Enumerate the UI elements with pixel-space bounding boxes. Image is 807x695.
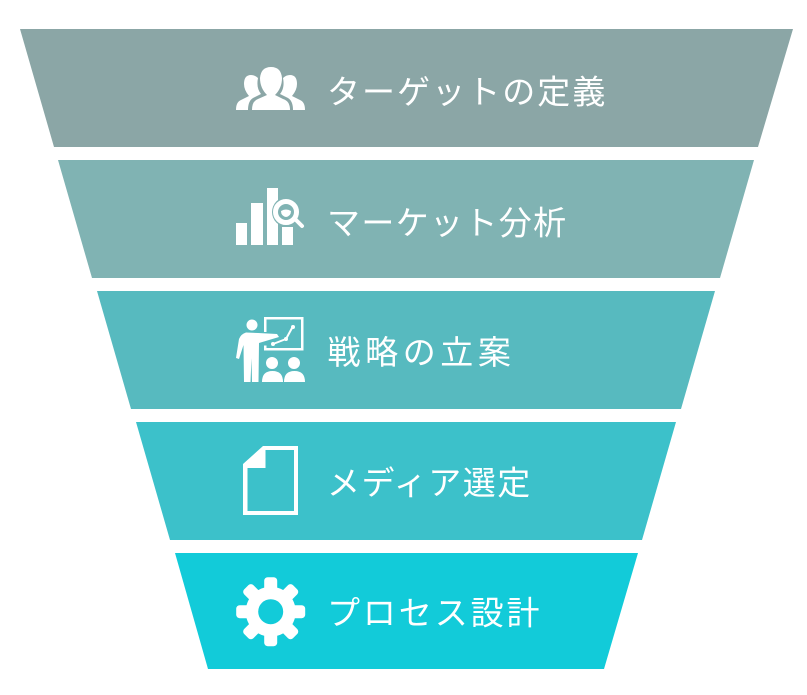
- icon: document: [243, 446, 298, 515]
- label: media selection: メディア選定: [327, 464, 532, 502]
- label: process design: プロセス設計: [327, 594, 542, 632]
- label: target definition: ターゲットの定義: [327, 74, 607, 110]
- icon: presenter with chart and audience: [236, 317, 305, 382]
- icon: gear: [236, 577, 305, 646]
- funnel tier 1: target definition: [20, 29, 793, 147]
- funnel tier 4: media selection: [136, 422, 676, 540]
- funnel tier 2: market analysis: [58, 160, 754, 278]
- label: strategy planning: 戦略の立案: [328, 334, 516, 371]
- icon: bar chart with magnifier: [236, 188, 302, 245]
- label: market analysis: マーケット分析: [327, 204, 567, 242]
- icon: group of people: [236, 67, 305, 110]
- funnel tier 3: strategy planning: [97, 291, 715, 409]
- funnel tier 5: process design: [175, 553, 638, 669]
